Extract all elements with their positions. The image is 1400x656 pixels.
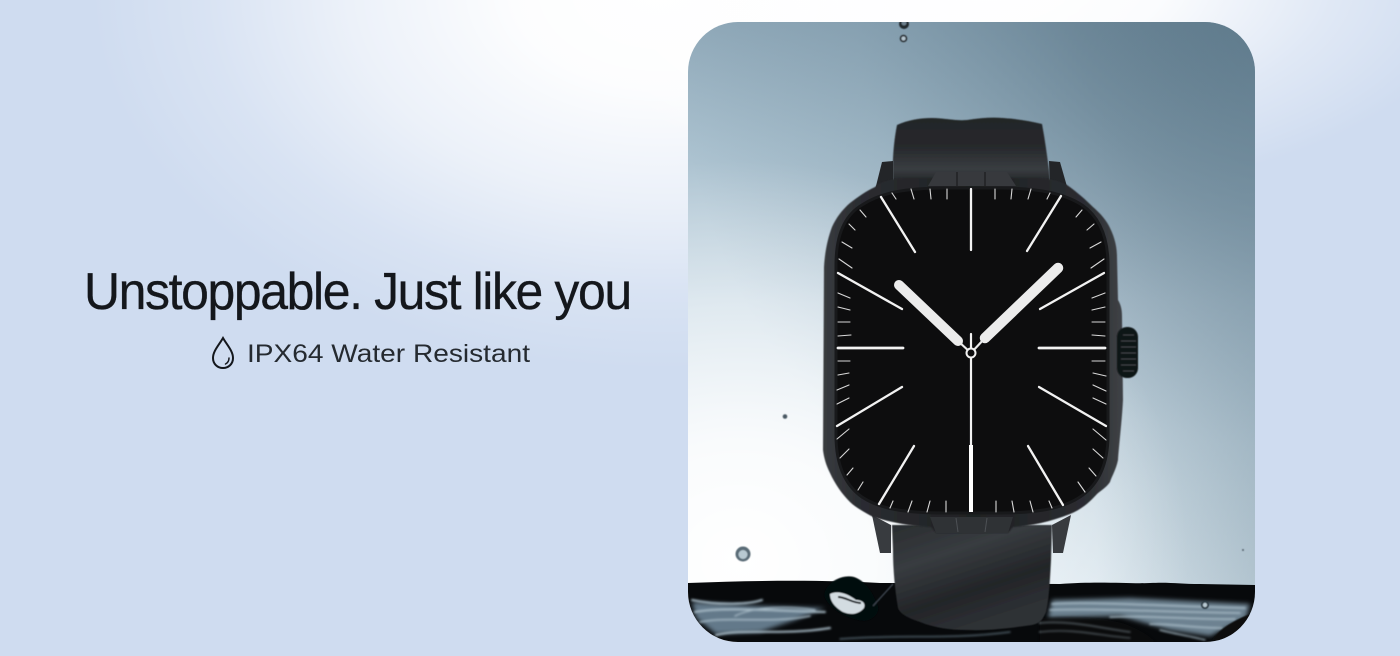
top bezel bumper	[928, 172, 1016, 186]
lugs	[872, 161, 1071, 553]
minute ticks	[837, 189, 1106, 512]
grey water areas	[692, 598, 1250, 636]
bottom bezel bumper	[930, 517, 1013, 533]
panel: watch photo	[688, 19, 1255, 642]
watch hands	[899, 268, 1058, 512]
second hand	[970, 334, 972, 445]
icon: water drop	[213, 338, 233, 368]
subtitle: IPX64 Water Resistant	[247, 340, 530, 368]
hour markers	[837, 189, 1106, 505]
water surface	[688, 581, 1255, 642]
right hand	[985, 268, 1058, 338]
case	[823, 178, 1123, 533]
watch	[823, 118, 1138, 630]
water droplet splash	[829, 576, 894, 615]
left hand	[899, 285, 958, 341]
centre pivot	[966, 348, 976, 358]
top strap	[893, 118, 1050, 182]
watch screen	[836, 188, 1108, 513]
small droplets	[736, 19, 1244, 609]
feature line: water resistance	[213, 338, 530, 368]
title: Unstoppable. Just like you	[84, 262, 632, 320]
panel sky background	[688, 22, 1255, 642]
bottom strap	[892, 525, 1052, 630]
crown	[1117, 327, 1138, 378]
